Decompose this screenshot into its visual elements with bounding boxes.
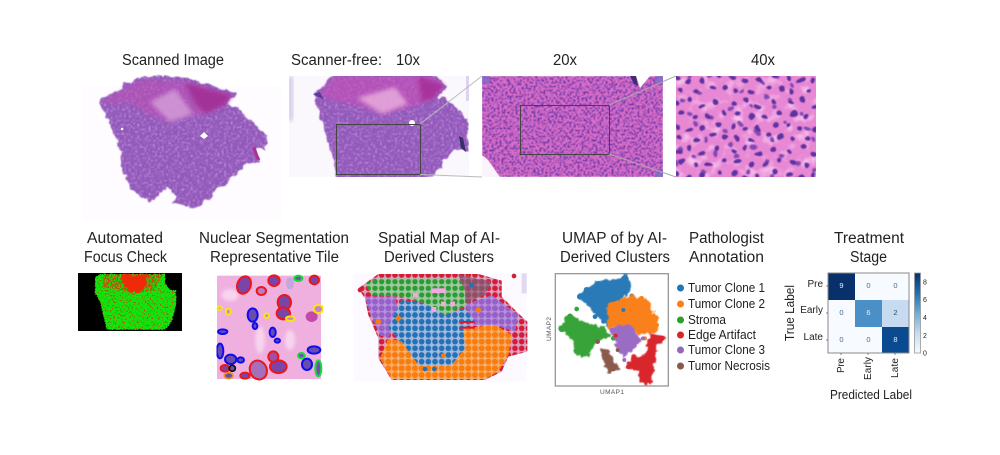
panel: UMAP [546, 230, 670, 396]
heading: Nuclear Segmentation Representative Tile: Nuclear Segmentation [199, 230, 349, 247]
heading: Automated Focus Check [84, 230, 167, 266]
row labels: Pre [807, 279, 823, 290]
heading: Spatial Map of AI-Derived Clusters [378, 230, 500, 266]
panel: spatial map [353, 230, 527, 382]
confusion matrix: 0 [866, 335, 871, 344]
confusion matrix: 2 [893, 308, 898, 317]
heading: Spatial Map of AI-Derived Clusters: Spatial Map of AI- [378, 230, 500, 247]
heading: Pathologist Annotation [689, 230, 765, 266]
connector lines from 20x to 40x [609, 76, 676, 177]
legend: cluster colours: Tumor Clone 2 [688, 297, 765, 311]
heading: Pathologist Annotation: Annotation [689, 249, 764, 266]
row labels: Late [804, 332, 823, 343]
legend: cluster colours: Stroma [688, 313, 726, 327]
colour bar: 6 [923, 297, 927, 304]
heading: Automated Focus Check: Automated [87, 230, 163, 247]
heading: Nuclear Segmentation Representative Tile: Representative Tile [210, 249, 339, 266]
confusion matrix: 0 [839, 308, 844, 317]
confusion matrix: 9 [839, 281, 844, 290]
heading: 40x: 40x [751, 52, 775, 69]
heading: Scanned Image: Scanned Image [122, 52, 224, 69]
column labels: Late [890, 358, 901, 378]
focus map [78, 273, 182, 331]
colour bar: 8 [923, 280, 927, 286]
panel: treatment stage confusion matrix [783, 230, 927, 402]
axis label: UMAP1: UMAP1 [600, 389, 624, 396]
cluster map [353, 273, 527, 382]
legend: cluster colours: Tumor Necrosis [688, 359, 770, 373]
cluster: Tumor Necrosis [595, 339, 620, 372]
axis label: UMAP2: UMAP2 [546, 317, 553, 341]
image: 20x tile [482, 76, 663, 177]
legend: cluster colours: Tumor Clone 1 [688, 281, 765, 295]
axis title: Predicted Label: Predicted Label [830, 388, 912, 402]
image: scanned whole-slide tissue [82, 76, 282, 220]
confusion matrix: 0 [893, 281, 898, 290]
heading: Pathologist Annotation: Pathologist [689, 230, 765, 247]
colour bar: 0 [923, 350, 927, 358]
confusion matrix [826, 273, 909, 355]
heading: UMAP of by AI-Derived Clusters: Derived Clusters [560, 249, 670, 266]
column labels: Pre [836, 358, 847, 373]
row labels: Early [800, 305, 823, 316]
zoom box on 10x tile [336, 124, 420, 174]
row labels [800, 279, 823, 343]
UMAP scatter plot [555, 274, 668, 386]
confusion matrix: 0 [839, 335, 844, 344]
heading: UMAP of by AI-Derived Clusters: UMAP of by AI- [562, 230, 667, 247]
cluster: Tumor Clone 1 [577, 275, 634, 325]
image: 40x tile [676, 76, 816, 177]
legend: cluster colours: Edge Artifact [688, 328, 757, 342]
confusion matrix: 8 [893, 335, 898, 344]
zoom box on 20x tile [520, 106, 610, 154]
axis title: True Label: True Label [783, 285, 797, 341]
heading: Automated Focus Check: Focus Check [84, 249, 167, 266]
legend: cluster colours: Tumor Clone 3 [688, 343, 765, 357]
heading: Nuclear Segmentation Representative Tile [199, 230, 349, 266]
heading: Treatment Stage: Stage [850, 249, 887, 266]
heading: Spatial Map of AI-Derived Clusters: Derived Clusters [384, 249, 494, 266]
cluster: Tumor Clone 3 [610, 324, 645, 362]
infographic: scanner-free pathology overview [78, 54, 927, 399]
legend: cluster colours [677, 281, 770, 373]
heading: 20x: 20x [553, 52, 577, 69]
cluster: Tumor Clone 2 [608, 296, 659, 340]
confusion matrix: 0 [866, 281, 871, 290]
image: 10x tile [288, 72, 469, 182]
colour bar: 4 [923, 315, 927, 322]
column labels: Early [863, 357, 874, 380]
panel: nuclear segmentation [199, 230, 349, 382]
heading: 10x: 10x [396, 52, 420, 69]
connector lines from 10x to 20x [420, 76, 482, 177]
segmentation tile [217, 274, 323, 382]
heading: Treatment Stage [834, 230, 905, 266]
panel: automated focus check [78, 230, 182, 331]
heading: UMAP of by AI-Derived Clusters [560, 230, 670, 266]
column labels [836, 357, 901, 380]
heading: Treatment Stage: Treatment [834, 230, 905, 247]
confusion matrix: 6 [866, 308, 871, 317]
colour bar: 2 [923, 333, 927, 340]
heading: Scanner-free: Scanner-free: [291, 52, 382, 69]
colour bar [914, 273, 927, 358]
cluster: Edge Artifact [614, 334, 664, 383]
cluster: Stroma [559, 307, 616, 356]
